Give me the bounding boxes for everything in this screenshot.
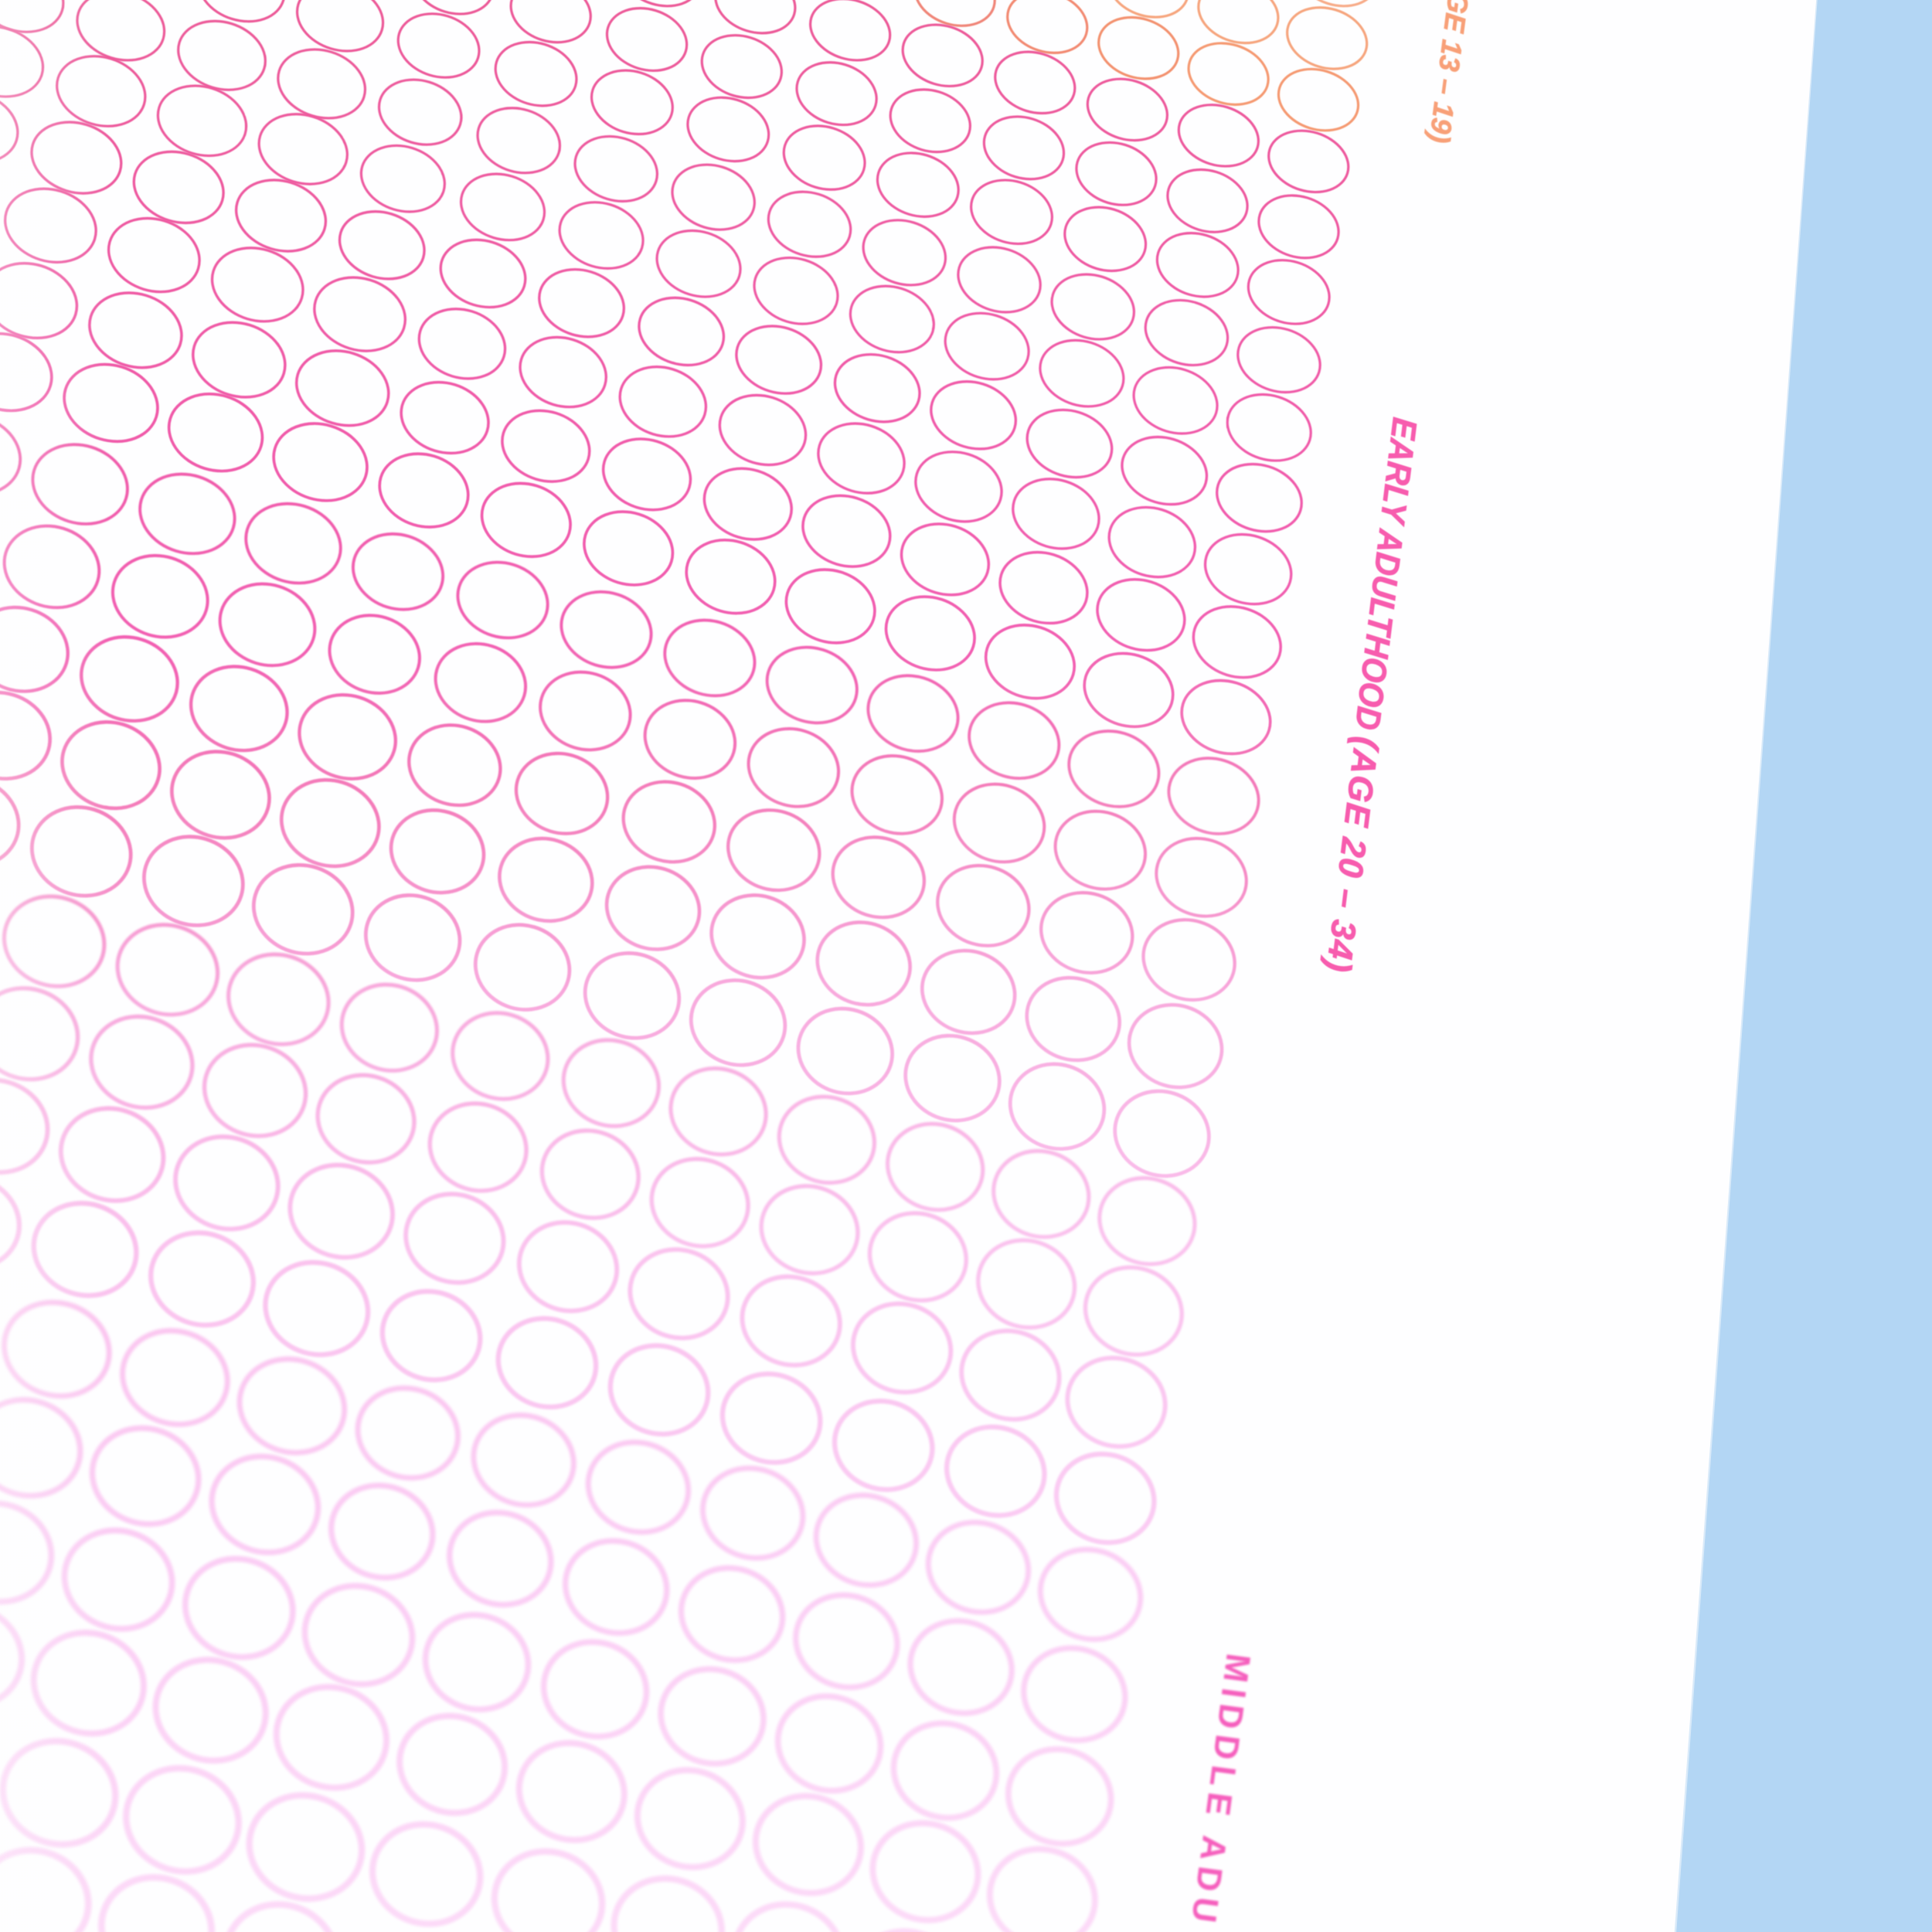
- row 25: [0, 1837, 349, 1932]
- row 4: [190, 0, 1337, 334]
- label: early adulthood: [1319, 416, 1423, 974]
- row 11: [0, 403, 1268, 845]
- row 15: [0, 765, 1219, 1188]
- row 10: [0, 322, 1280, 764]
- row 9: [0, 252, 1290, 688]
- label: middle adulthood: MIDDLE ADU: [1183, 1651, 1257, 1930]
- row 22: [0, 1490, 1123, 1856]
- row 2: [613, 0, 1356, 202]
- row 23: [0, 1592, 1107, 1932]
- label: early adulthood: (AGE 20 – 34): [1319, 735, 1386, 974]
- row 19: [0, 1164, 1165, 1555]
- row 20: [0, 1290, 1151, 1651]
- row 17: [0, 976, 1192, 1366]
- row 8: [0, 148, 1300, 614]
- row 18: [0, 1067, 1176, 1458]
- label: early adulthood: EARLY ADULTHOOD: [1348, 416, 1423, 732]
- row 5: [0, 0, 1328, 402]
- row 6: [0, 16, 1319, 471]
- row 21: [0, 1386, 1137, 1753]
- blue band on the right: [1675, 0, 1932, 1932]
- row 12: [0, 515, 1256, 927]
- row 13: [0, 596, 1245, 1011]
- row 14: [0, 681, 1232, 1099]
- circle grid: [0, 0, 1384, 1932]
- row 24: [0, 1727, 973, 1932]
- row 7: [0, 80, 1310, 542]
- row 3: [406, 0, 1346, 267]
- adolescence circles (orange): [907, 0, 1384, 140]
- row 16: [0, 884, 1206, 1276]
